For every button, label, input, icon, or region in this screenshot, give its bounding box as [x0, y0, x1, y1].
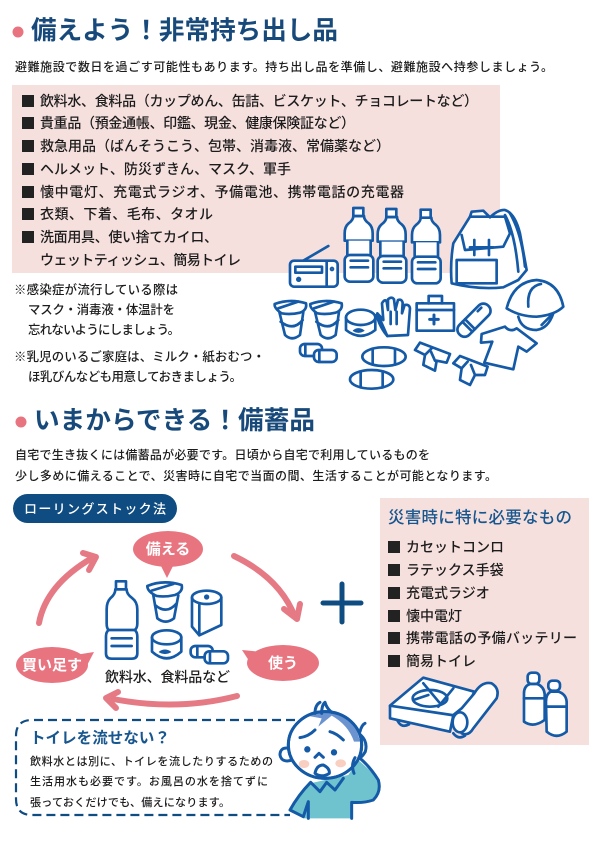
boy: head — [288, 712, 362, 778]
callout: prepare — [133, 531, 203, 578]
icon: canned fish — [346, 310, 375, 336]
icon: batteries — [191, 646, 228, 663]
icon: plus — [323, 584, 361, 622]
note: families with infants: ※乳児のいるご家庭は、ミルク・紙おむつ・ — [14, 349, 265, 364]
checklist: emergency items: 貴重品（預金通帳、印鑑、現金、健康保険証など） — [40, 115, 355, 131]
note: infection precautions: マスク・消毒液・体温計を — [28, 302, 175, 317]
boy: ears — [280, 748, 293, 761]
illustration: worried boy — [280, 702, 379, 818]
boy: cheeks — [299, 759, 346, 768]
panel list: ラテックス手袋 — [406, 562, 504, 578]
icon: face masks — [350, 347, 406, 389]
icon: batteries — [300, 344, 337, 362]
icon: gas cylinders — [524, 673, 567, 736]
icon: radio — [290, 246, 338, 287]
intro text: section 2: 自宅で生き抜くには備蓄品が必要です。日頃から自宅で利用しているものを — [15, 447, 430, 462]
cycle arrows — [39, 553, 300, 708]
checklist: emergency items: 懐中電灯、充電式ラジオ、予備電池、携帯電話の充電器 — [40, 184, 404, 200]
checklist: emergency items: ヘルメット、防災ずきん、マスク、軍手 — [40, 161, 291, 177]
icon: cup — [147, 582, 182, 622]
callout body: 生活用水も必要です。お風呂の水を捨てずに — [30, 774, 268, 788]
checklist: emergency items: 飲料水、食料品（カップめん、缶詰、ビスケット、チョコレートなど） — [40, 93, 478, 109]
callout: buy more: 買い足す — [22, 657, 82, 674]
note: infection precautions: ※感染症が流行している際は — [14, 282, 178, 297]
icon: underwear — [415, 343, 488, 385]
panel list: カセットコンロ — [406, 539, 504, 555]
panel heading: 災害時に特に必要なもの — [388, 508, 572, 527]
callout body: 飲料水とは別に、トイレを流したりするための — [30, 754, 273, 768]
illustration: emergency supplies — [275, 208, 563, 389]
icon: flashlight — [455, 301, 493, 340]
icon: first aid kit — [417, 296, 454, 331]
panel list: 簡易トイレ — [406, 653, 476, 669]
boy: shirt — [290, 760, 379, 818]
intro text: section 1: 避難施設で数日を過ごす可能性もあります。持ち出し品を準備し、避難施設へ持参しましょう。 — [15, 59, 553, 74]
callout heading: トイレを流せない？ — [30, 729, 170, 747]
callout: use — [242, 645, 319, 681]
panel: especially necessary items — [380, 498, 589, 745]
icon: water bottles — [345, 208, 441, 283]
panel list: 充電式ラジオ — [406, 585, 490, 601]
callout body: 張っておくだけでも、備えになります。 — [30, 795, 230, 809]
icon: t-shirt — [481, 327, 537, 369]
checklist: emergency items — [22, 93, 478, 268]
panel list: 懐中電灯 — [406, 608, 462, 624]
panel list: 携帯電話の予備バッテリー — [406, 630, 577, 646]
note: families with infants — [14, 349, 265, 384]
icon: cups — [275, 301, 342, 338]
heading: section 2: いまからできる！備蓄品 — [34, 406, 315, 435]
illustration: water and food — [106, 581, 228, 663]
callout: use: 使う — [268, 654, 298, 672]
icon: paper roll — [192, 591, 221, 635]
icon: bottle — [106, 581, 137, 659]
note: families with infants: ほ乳びんなども用意しておきましょう。 — [28, 370, 242, 384]
checklist: emergency items: 救急用品（ばんそうこう、包帯、消毒液、常備薬など） — [40, 138, 390, 154]
boy: hair — [307, 712, 360, 742]
icon: helmet — [507, 280, 563, 330]
icon: backpack — [451, 210, 527, 288]
note: infection precautions — [14, 282, 180, 337]
callout: buy more — [16, 647, 94, 683]
callout: toilet water — [16, 720, 295, 815]
intro text: section 2 — [15, 447, 497, 483]
icon: work gloves — [377, 298, 410, 336]
callout: prepare: 備える — [146, 541, 190, 558]
checklist: emergency items: ウェットティッシュ、簡易トイレ — [40, 252, 241, 268]
label: rolling stock method: ローリングストック法 — [24, 502, 166, 516]
label: rolling stock method — [13, 494, 177, 523]
note: infection precautions: 忘れないようにしましょう。 — [28, 323, 180, 337]
panel: checklist background — [12, 85, 500, 273]
checklist: emergency items: 衣類、下着、毛布、タオル — [40, 206, 213, 222]
checklist: emergency items: 洗面用具、使い捨てカイロ、 — [40, 229, 218, 245]
boy: face — [300, 730, 343, 776]
icon: can — [152, 630, 181, 658]
heading: section 1: 備えよう！非常持ち出し品 — [31, 16, 338, 45]
intro text: section 2: 少し多めに備えることで、災害時に自宅で当面の間、生活することが可能となります。 — [15, 468, 497, 483]
caption: water and food: 飲料水、食料品など — [105, 669, 230, 685]
panel list — [388, 539, 577, 669]
icon: camping stove — [390, 678, 498, 737]
callout body — [30, 754, 273, 809]
